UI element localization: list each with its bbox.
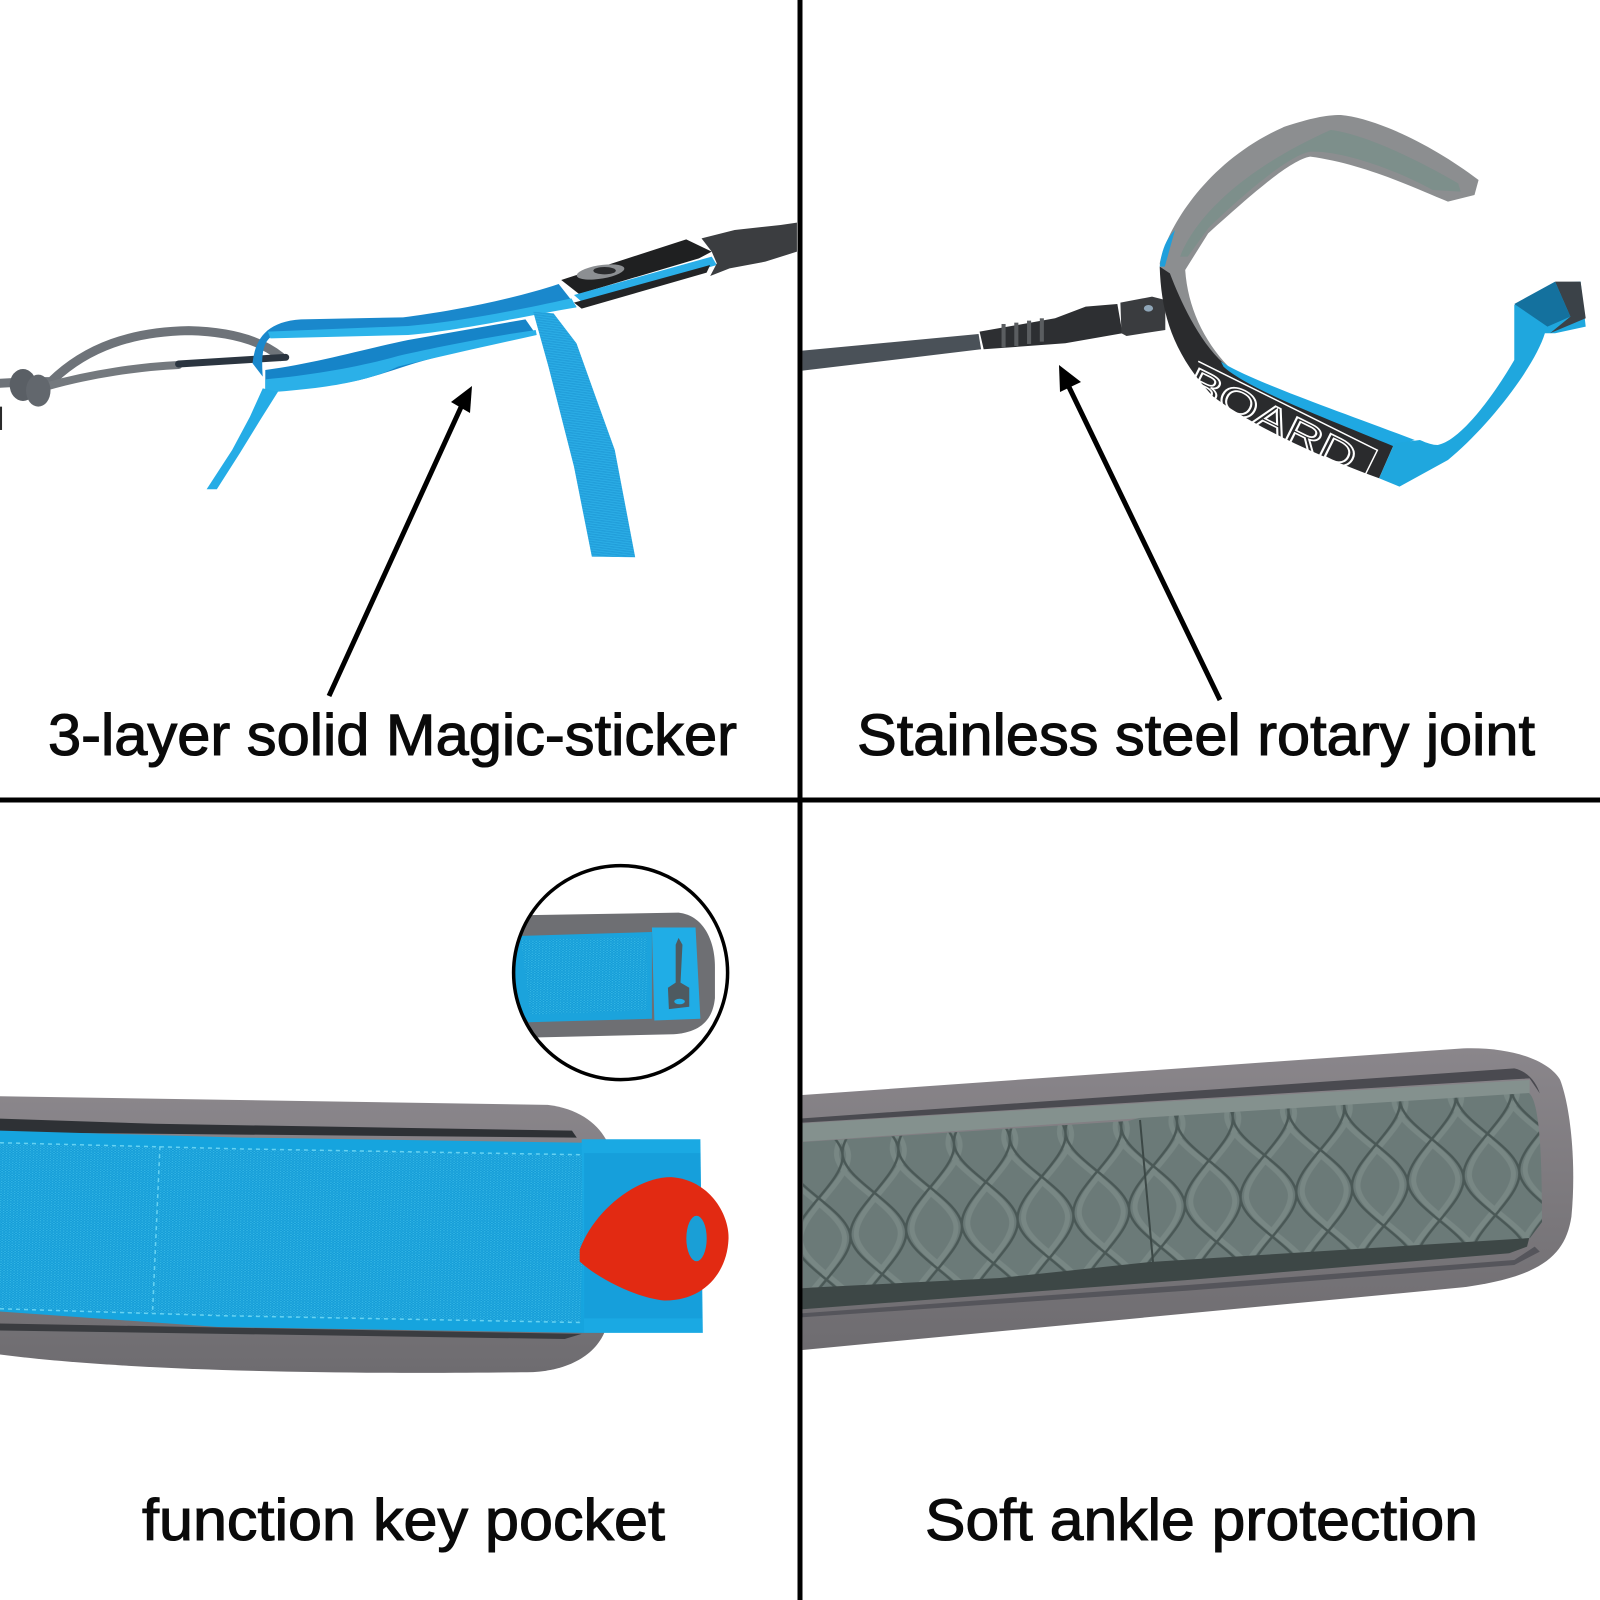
arrow: magic sticker xyxy=(329,386,472,696)
left strap tail xyxy=(207,388,278,489)
blue hook strap xyxy=(1379,282,1586,487)
padding centre seam xyxy=(1140,1120,1153,1262)
blue edge xyxy=(1160,230,1175,267)
grey bungee cord xyxy=(0,331,286,407)
panel: rotary joint leash photo xyxy=(803,115,1586,487)
upper blue strap xyxy=(253,284,577,377)
caption: key pocket: function key pocket xyxy=(142,1488,665,1553)
panel: key pocket photo xyxy=(0,1096,729,1373)
black logo band xyxy=(1160,267,1394,478)
panel: magic sticker leash photo xyxy=(0,223,797,557)
stitch lines xyxy=(0,1143,584,1323)
rotary joint xyxy=(1120,297,1165,336)
grey belt xyxy=(0,1096,606,1373)
dark gap xyxy=(803,1237,1530,1309)
inner tread xyxy=(1180,130,1461,257)
grey neoprene band xyxy=(1160,115,1479,367)
right strap tail xyxy=(533,312,635,557)
lower blue strap xyxy=(265,319,536,392)
diamond-pattern padding xyxy=(803,1093,1542,1288)
cable collar xyxy=(702,223,797,276)
inset circle: key pocket detail xyxy=(514,866,728,1080)
pocket flap xyxy=(582,1139,703,1333)
black cable xyxy=(803,334,981,371)
edge fragment xyxy=(0,407,2,430)
caption: rotary joint: Stainless steel rotary joint xyxy=(857,703,1535,768)
connector xyxy=(980,304,1122,349)
logo text on band: BOARD xyxy=(1180,360,1363,480)
stitched seams xyxy=(803,1068,1540,1123)
light strip xyxy=(803,1080,1530,1142)
logo text on band xyxy=(1180,360,1378,487)
divider: vertical xyxy=(798,0,802,1600)
caption: magic sticker: 3-layer solid Magic-sticker xyxy=(48,703,737,768)
blue band xyxy=(0,1131,584,1333)
velcro area xyxy=(0,1143,584,1323)
divider: horizontal xyxy=(0,798,1600,802)
grey neoprene cuff xyxy=(803,1048,1573,1350)
black plate and webbing xyxy=(561,239,712,294)
red key xyxy=(580,1177,729,1300)
dark seam xyxy=(0,1119,577,1138)
caption: ankle protection: Soft ankle protection xyxy=(925,1488,1478,1553)
panel: ankle protection photo xyxy=(803,1048,1573,1350)
arrow: rotary joint xyxy=(1059,365,1220,700)
